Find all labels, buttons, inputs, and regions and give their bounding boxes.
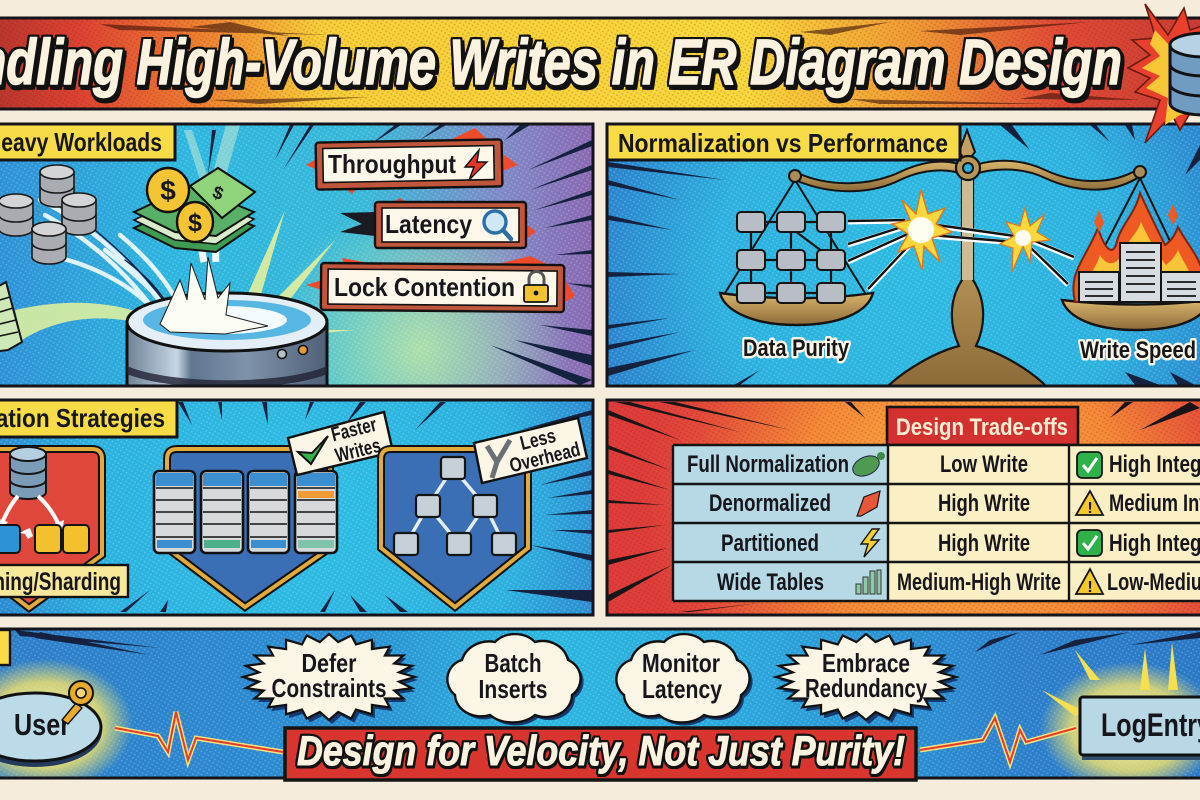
row: partitioned: Partitioned [721,530,819,557]
metric tag: latency [340,198,536,248]
table header [887,407,1078,445]
row: partitioned [721,529,1200,557]
right pan [1062,300,1200,330]
splash [160,257,268,334]
icon: check mark [298,436,328,464]
burst: collision [892,190,952,270]
partition blocks [0,525,89,553]
small database icons [0,165,96,264]
tag: less overhead: Overhead [507,439,583,477]
tip: batch inserts [447,634,584,725]
panel: normalization vs performance [607,124,1200,386]
left pan [720,293,873,325]
starburst with database icon [1128,4,1200,143]
metric tag: lock contention: Lock Contention [334,272,515,302]
table header: Design Trade-offs [896,414,1068,441]
tag: less overhead: Less [518,425,558,455]
entity: log entry [1080,697,1200,760]
row: denormalized: Denormalized [709,490,831,517]
balance scale [720,130,1200,386]
icon: bar chart [856,570,881,594]
slogan banner: Design for Velocity, Not Just Purity! [297,727,905,774]
ER diagram grid [737,212,845,303]
row: denormalized [709,490,1200,517]
pulse line left [115,712,283,760]
wide table columns [154,471,337,553]
yellow and green light rays [245,210,355,335]
tip: embrace redundancy [776,634,959,724]
glow: log entry [1040,662,1200,794]
icon: lightning bolt [465,150,487,180]
coin: $ [160,175,176,206]
panel: tips footer [0,629,1200,794]
icon: warning triangle [1076,491,1103,517]
footer label tab [0,630,10,665]
panel: optimization strategies [0,400,593,615]
icon: check box [1077,452,1102,478]
water streams [38,198,174,304]
scale beam [795,161,1142,191]
row: partitioned: High Write [938,530,1030,557]
tip: defer constraints: Defer [302,648,356,678]
icon: key [62,681,93,724]
scale pillar and base [888,160,1046,386]
entity: user: User [14,707,70,742]
data tables in flames [1079,243,1200,302]
icon: magnifying glass [484,211,511,239]
scale strings [725,178,1197,298]
row: denormalized: High Write [938,490,1030,517]
lightning sparks [1042,642,1178,716]
table [673,407,1200,601]
icon: rocket [857,491,880,516]
tip: monitor latency: Latency [642,674,722,704]
panel heading: Normalization vs Performance [618,128,948,158]
label: data purity: Data Purity [743,335,850,362]
money stack: $ [210,182,226,204]
icon: padlock [524,272,548,302]
document [0,282,22,352]
icon: warning triangle: ! [1087,579,1093,596]
icon: turtle [850,452,885,480]
row: wide tables [717,569,1200,596]
metric tag: throughput [306,128,518,194]
panel: design trade-offs [607,400,1200,615]
coin: $ [188,209,202,237]
metric tag: lock contention [306,256,575,312]
icon: warning triangle: ! [1087,500,1093,517]
row: wide tables: Wide Tables [717,569,824,596]
row: wide tables: Medium-High Write [897,569,1061,596]
strategy: denormalized shield [154,449,337,607]
row: full normalization: Low Write [940,451,1028,478]
arrows to burst [848,220,1074,290]
burst: second collision [1000,208,1050,272]
tip: batch inserts: Inserts [478,674,548,704]
tip: embrace redundancy: Redundancy [805,673,927,703]
tip: defer constraints [243,634,418,724]
tag: faster writes: Writes [333,435,383,467]
tag: less overhead [474,418,587,483]
glow: user [0,659,133,791]
tag: faster writes: Faster [329,414,379,446]
big database [127,293,327,388]
icon: check box [1077,530,1102,556]
tip: batch inserts: Batch [484,648,542,678]
pulse line right [920,718,1076,762]
tree diagram [394,457,516,555]
icon: y-shaped tool [487,440,510,478]
title banner [0,18,1200,109]
icon: lightning bolt [861,529,879,557]
tip: monitor latency: Monitor [642,648,720,678]
label: partitioning sharding [0,565,128,597]
split arrows [1,494,60,524]
tag: faster writes [288,412,393,475]
strategy: wide tables shield [381,449,528,607]
tip: embrace redundancy: Embrace [822,648,910,678]
flames [1073,193,1200,302]
icon: database [1170,33,1200,115]
strategy: partitioning shield [0,447,128,608]
metric tag: throughput: Throughput [328,149,456,179]
icon: database [10,447,46,499]
document stream [15,302,133,340]
tip: defer constraints: Constraints [272,673,386,703]
row: full normalization [687,451,1200,480]
entity: user [0,681,102,767]
panel: heavy workloads [0,124,593,388]
tip: monitor latency [616,634,753,725]
icon: warning triangle [1076,569,1103,596]
metric tag: latency: Latency [385,209,472,239]
row: full normalization: Full Normalization [687,451,849,478]
money stack [134,168,255,252]
